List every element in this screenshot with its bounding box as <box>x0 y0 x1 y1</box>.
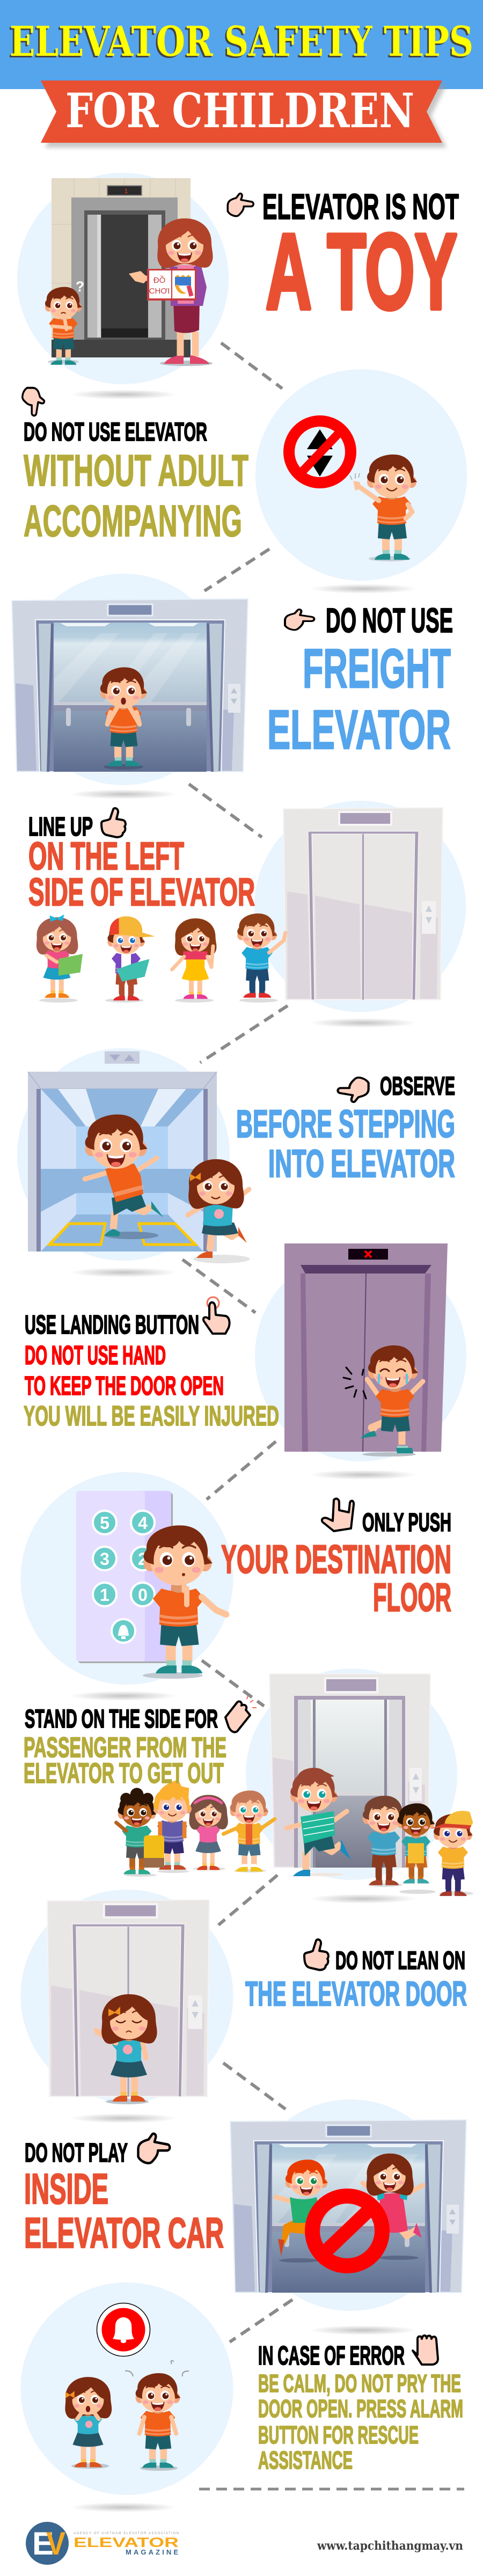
woman holding toy book: CHƠI <box>149 287 170 296</box>
icon: rock hand <box>322 1499 354 1531</box>
purple elevator door <box>284 1243 448 1452</box>
icon: no elevator arrows sign <box>289 421 351 483</box>
text block: stand on the side <box>24 1696 257 1789</box>
elevator closed doors <box>47 1900 209 2097</box>
text block: without adult: WITHOUT ADULT <box>24 445 248 495</box>
thinking boy <box>143 1525 226 1679</box>
girl with green book <box>36 914 83 1002</box>
elevator button panel: 5 <box>100 1513 109 1533</box>
elevator button panel: 3 <box>100 1549 109 1569</box>
icon: hand pressing button <box>203 1297 230 1334</box>
icon: alarm bell button <box>97 2303 150 2356</box>
text block: stand on the side: ELEVATOR TO GET OUT <box>24 1758 224 1789</box>
logo: elevator magazine: V <box>46 2526 65 2562</box>
elevator floor indicator <box>105 1051 140 1064</box>
panel: freight elevator illustration <box>12 574 248 799</box>
icon: hand pointing left <box>338 1078 369 1102</box>
surprised girl <box>65 2377 112 2469</box>
dashed connector 4 <box>200 1006 288 1063</box>
icon: thumbs up <box>101 808 126 837</box>
dashed connector 9 <box>223 2063 286 2109</box>
panel: stand on the side illustration <box>116 1668 473 1904</box>
elevator button panel: 2 <box>138 1549 148 1569</box>
text block: in case of error <box>258 2336 463 2474</box>
girl with pink headband <box>189 1795 228 1870</box>
woman holding toy book: ĐỒ <box>153 275 165 285</box>
freight elevator <box>12 599 248 772</box>
woman holding toy book <box>129 218 213 366</box>
three waiting children <box>363 1796 473 1896</box>
logo: elevator magazine: AGENCY OF VIETNAM ELEVATOR ASSOCIATION <box>74 2532 179 2535</box>
boy with yellow book <box>397 1803 436 1894</box>
panel: observe before stepping into elevator <box>17 1048 250 1277</box>
website url: www.tapchithangmay.vn <box>317 2539 463 2553</box>
boy in blue shirt pointing <box>237 913 286 1002</box>
panel: door pinch illustration <box>255 1243 466 1480</box>
blond boy with backpack <box>153 1780 192 1873</box>
text block: elevator is not a toy <box>228 187 459 332</box>
elevator with open door: 1 <box>125 187 128 195</box>
jumping boy and girl <box>276 2154 423 2263</box>
text block: line up: ON THE LEFT <box>28 835 184 878</box>
boy with cap and teal book <box>105 916 155 1002</box>
text block: without adult: ACCOMPANYING <box>24 496 242 546</box>
dashed connector 1 <box>221 343 282 389</box>
crying boy with trapped hand <box>343 1345 423 1457</box>
text block: use landing button: USE LANDING BUTTON <box>25 1311 199 1340</box>
dashed connector 7 <box>202 1660 264 1706</box>
icon: pointing hand right <box>228 194 253 216</box>
confused boy <box>45 279 84 365</box>
icon: prohibition sign <box>312 2196 382 2266</box>
elevator button panel: 1 <box>100 1585 109 1605</box>
dark-haired boy with yellow bag <box>116 1788 164 1877</box>
text block: use landing button: TO KEEP THE DOOR OPEN <box>25 1372 224 1401</box>
icon: pointing hand right <box>285 610 314 630</box>
icon: clapping hands <box>225 1696 257 1732</box>
text block: in case of error: ASSISTANCE <box>258 2446 353 2474</box>
freight elevator <box>230 2120 466 2293</box>
text block: only push your destination floor <box>221 1499 451 1620</box>
text block: observe before stepping <box>236 1072 455 1185</box>
logo: elevator magazine: ELEVATOR <box>74 2535 179 2550</box>
icon: pointing hand right <box>138 2134 170 2163</box>
text block: use landing button: DO NOT USE HAND <box>25 1341 166 1370</box>
elevator opening <box>269 1674 430 1868</box>
elevator with open door <box>52 178 191 357</box>
logo: elevator magazine: MAGAZINE <box>126 2548 178 2556</box>
angry boy <box>125 2361 189 2471</box>
confused boy: ? <box>76 279 84 295</box>
text block: without adult <box>23 388 248 546</box>
text block: line up: LINE UP <box>28 813 93 841</box>
panel: no playing in elevator car <box>230 2099 466 2335</box>
elevator button panel: 0 <box>138 1585 148 1605</box>
text block: use landing button: YOU WILL BE EASILY INJURED <box>24 1401 279 1432</box>
icon: hand pointing down <box>23 388 44 415</box>
sleepy girl leaning <box>93 1994 157 2104</box>
panel: do not lean on door <box>20 1890 233 2123</box>
logo: elevator magazine <box>26 2522 179 2565</box>
boy in yellow vest <box>223 1790 275 1872</box>
boy in striped shirt <box>363 1796 405 1887</box>
dashed connector 5 <box>182 1260 255 1313</box>
text block: do not play: ELEVATOR CAR <box>24 2209 224 2257</box>
panel: alarm and frightened children <box>20 2282 233 2512</box>
panel: elevator is not a toy illustration <box>17 173 229 399</box>
text block: stand on the side: STAND ON THE SIDE FOR <box>25 1705 218 1733</box>
dashed connector 8 <box>218 1875 277 1925</box>
running girl <box>188 1159 250 1263</box>
surprised boy <box>100 667 147 770</box>
text block: do not play: DO NOT PLAY <box>25 2139 128 2168</box>
jumping boy <box>85 1115 163 1236</box>
icon: raised open hand <box>413 2336 438 2365</box>
text block: do not use freight elevator <box>267 601 453 760</box>
panel: destination floor illustration <box>20 1472 233 1701</box>
four children in line <box>36 913 286 1002</box>
boy in yellow cap <box>430 1811 473 1896</box>
text block: line up: SIDE OF ELEVATOR <box>28 871 255 914</box>
waving boy <box>350 455 417 561</box>
ribbon: for children: FOR CHILDREN <box>65 83 414 138</box>
text block: use landing button <box>24 1297 279 1432</box>
text block: do not play: INSIDE <box>24 2165 108 2213</box>
text block: line up <box>28 808 255 914</box>
panel: closed elevator door <box>254 801 466 1028</box>
icon: thumbs up <box>304 1940 328 1970</box>
girl in yellow dress <box>172 918 216 1002</box>
dashed connector 3 <box>189 784 262 837</box>
elevator button panel <box>76 1491 173 1663</box>
text block: do not lean on <box>245 1940 467 2013</box>
elevator closed doors <box>283 808 443 1000</box>
running boy <box>287 1768 351 1876</box>
header banner <box>0 0 483 89</box>
text block: stand on the side: PASSENGER FROM THE <box>24 1732 226 1763</box>
text block: do not play <box>24 2134 224 2257</box>
text block: without adult: DO NOT USE ELEVATOR <box>24 418 207 447</box>
dashed connector 6 <box>207 1441 276 1499</box>
four children group <box>116 1780 275 1877</box>
dashed divider <box>199 2488 464 2490</box>
logo: elevator magazine: E <box>32 2526 54 2562</box>
dashed connector 2 <box>204 549 269 591</box>
elevator button panel: 4 <box>138 1513 148 1533</box>
dashed connector 10 <box>230 2300 292 2342</box>
panel: no elevator sign and boy <box>255 369 467 594</box>
elevator car interior <box>28 1072 217 1252</box>
